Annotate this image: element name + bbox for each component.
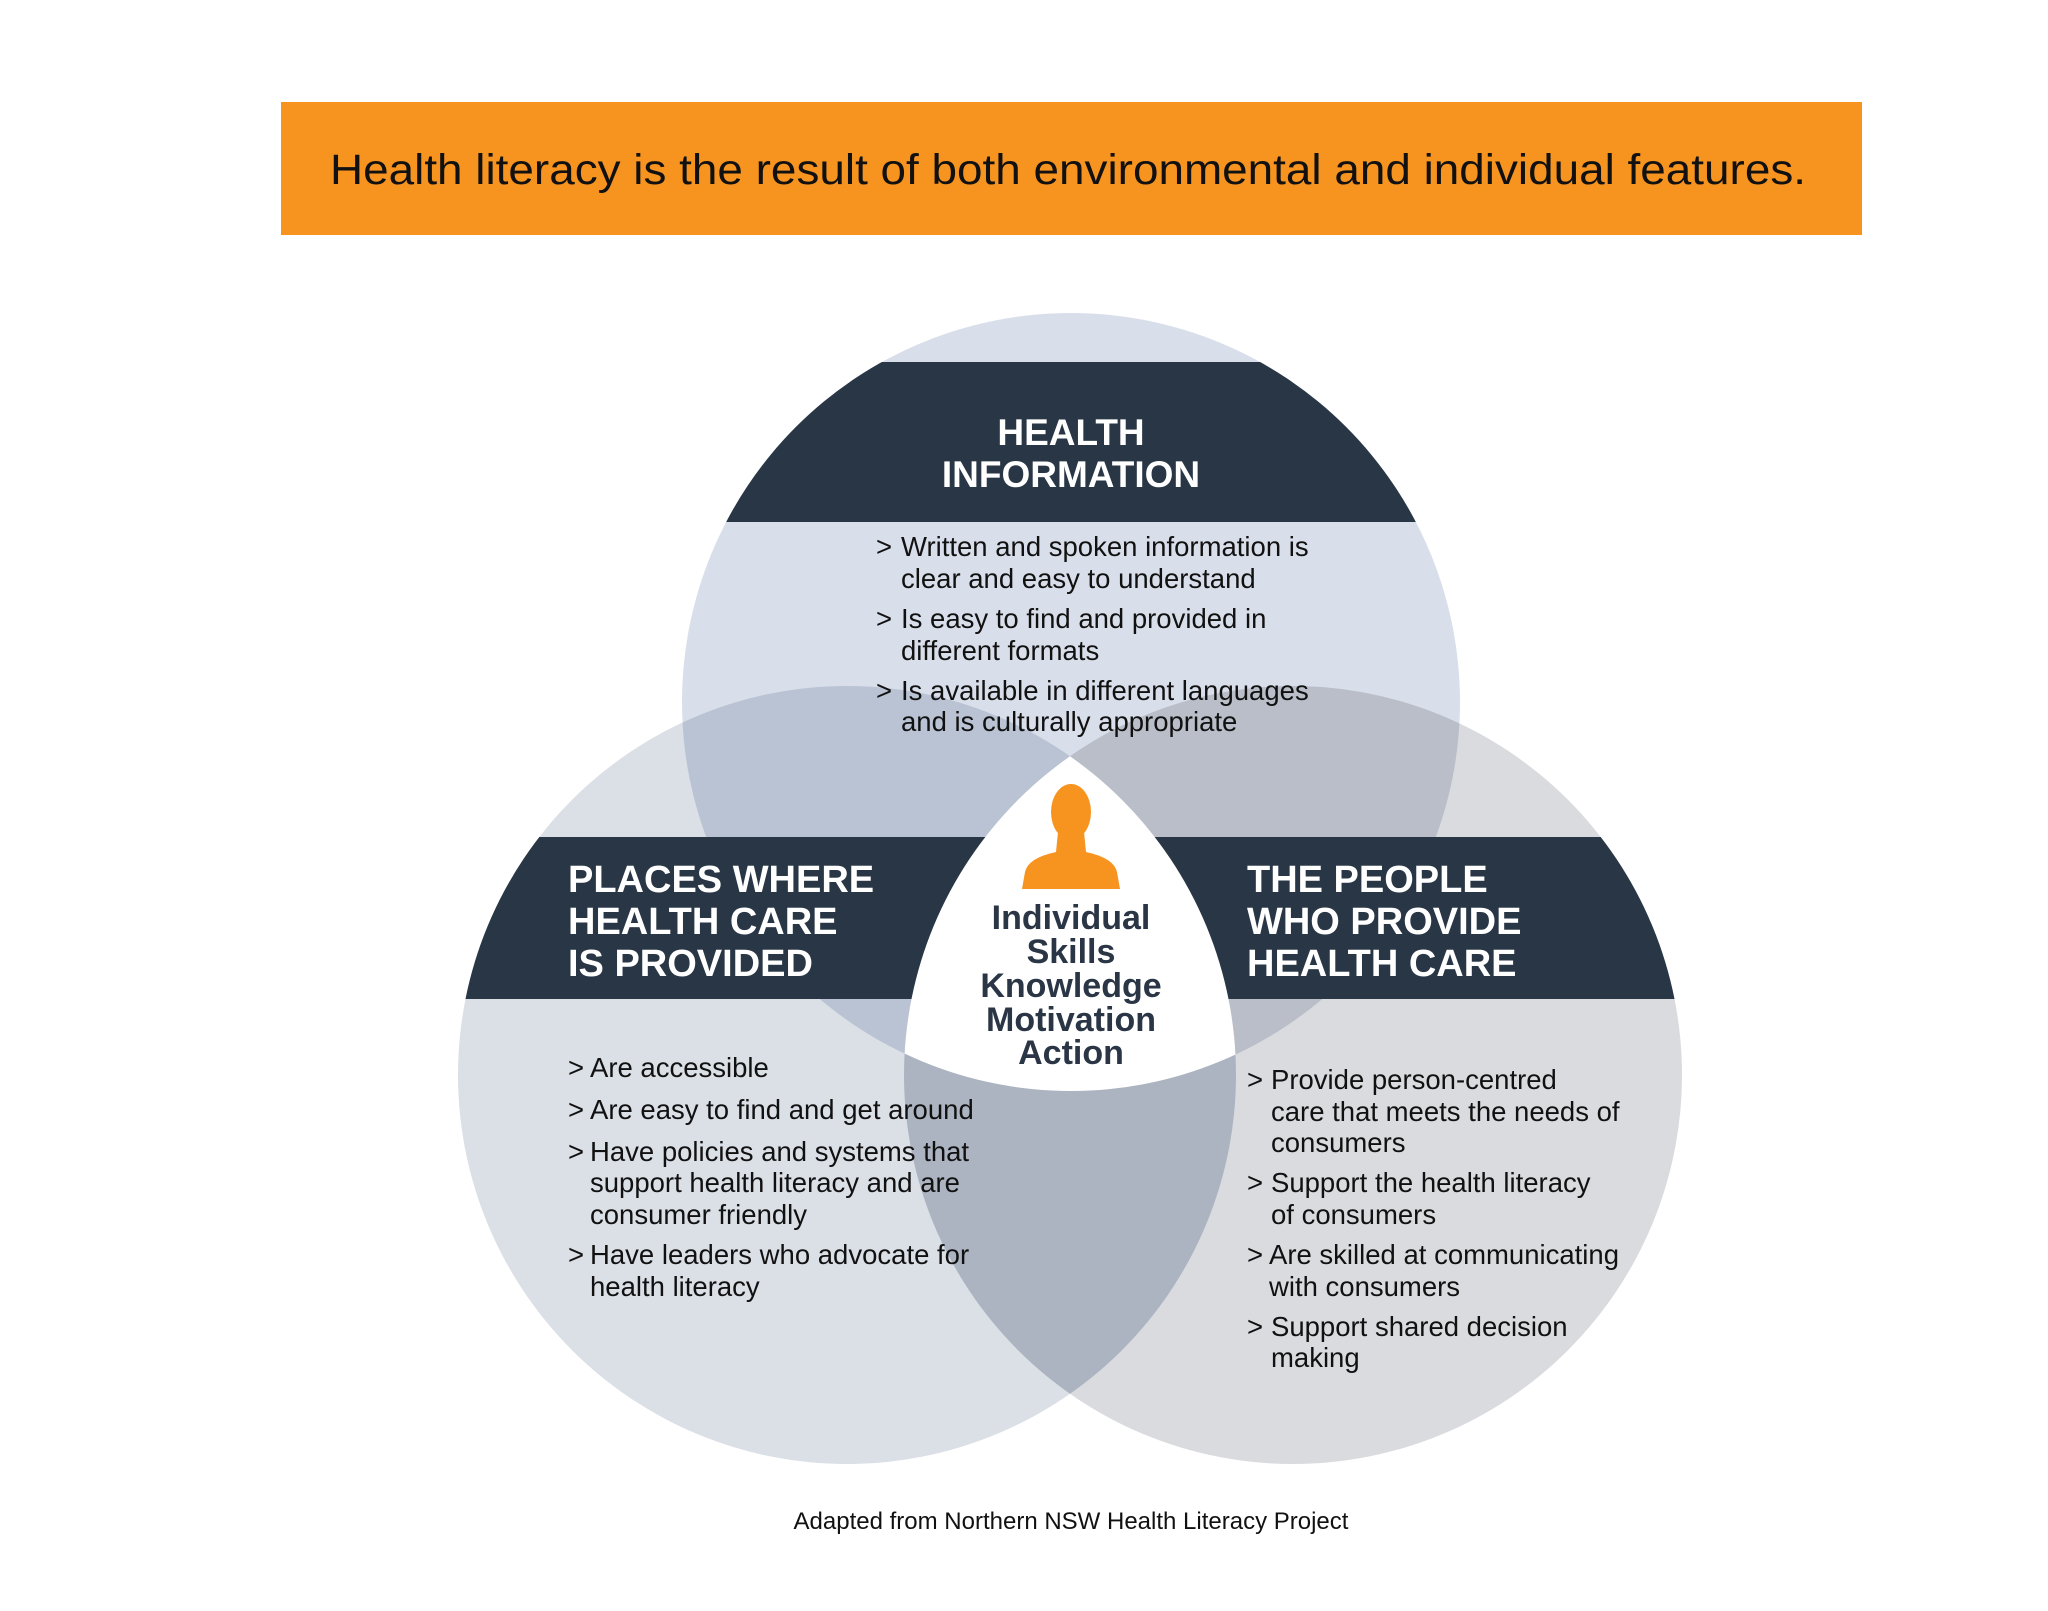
- heading: places where health care is provided: [568, 859, 874, 985]
- bullets: health information: Is available in different languages: [901, 675, 1309, 706]
- banner: [281, 102, 1862, 235]
- center text: individual: Action: [1018, 1034, 1124, 1072]
- heading: the people who provide health care: [1247, 859, 1521, 985]
- bullets: health information: clear and easy to understand: [901, 563, 1256, 594]
- heading: places where health care is provided: PLACES WHERE: [568, 859, 874, 901]
- bullets: places: support health literacy and are: [590, 1167, 960, 1198]
- bullets: places: [568, 1052, 974, 1302]
- bullets: people: care that meets the needs of: [1271, 1096, 1620, 1127]
- bullets: health information: Is easy to find and provided in: [901, 603, 1266, 634]
- bullets: people: making: [1271, 1342, 1360, 1373]
- heading: places where health care is provided: HEALTH CARE: [568, 901, 838, 943]
- heading: health information: INFORMATION: [942, 454, 1200, 495]
- bullets: people: [1247, 1064, 1620, 1373]
- center text: individual: [980, 899, 1162, 1072]
- bullets: places: Are accessible: [590, 1052, 769, 1083]
- bullets: places: >: [568, 1052, 584, 1083]
- bullets: people: >: [1247, 1311, 1263, 1342]
- heading: places where health care is provided: IS PROVIDED: [568, 943, 813, 985]
- bullets: health information: Written and spoken information is: [901, 531, 1309, 562]
- bullets: places: consumer friendly: [590, 1199, 807, 1230]
- bullets: people: Support shared decision: [1271, 1311, 1568, 1342]
- bullets: people: consumers: [1271, 1127, 1406, 1158]
- bullets: places: Are easy to find and get around: [590, 1094, 974, 1125]
- footer source: Adapted from Northern NSW Health Literacy Project: [794, 1508, 1349, 1535]
- bullets: health information: and is culturally appropriate: [901, 706, 1237, 737]
- heading: the people who provide health care: HEALTH CARE: [1247, 943, 1517, 985]
- bullets: people: Support the health literacy: [1271, 1167, 1591, 1198]
- bullets: places: Have policies and systems that: [590, 1136, 969, 1167]
- heading: health information: HEALTH: [997, 412, 1145, 453]
- center text: individual: Individual: [992, 899, 1150, 937]
- bullets: places: >: [568, 1136, 584, 1167]
- heading: the people who provide health care: WHO PROVIDE: [1247, 901, 1521, 943]
- center text: individual: Skills: [1027, 933, 1115, 971]
- bullets: health information: >: [876, 675, 892, 706]
- bullets: places: Have leaders who advocate for: [590, 1239, 969, 1270]
- bullets: people: >: [1247, 1064, 1263, 1095]
- bullets: health information: >: [876, 603, 892, 634]
- bullets: people: >: [1247, 1239, 1263, 1270]
- banner: Health literacy is the result of both environmental and individual features.: [330, 146, 1806, 194]
- icon: person: [1022, 784, 1120, 889]
- bullets: people: with consumers: [1268, 1271, 1460, 1302]
- bullets: places: health literacy: [590, 1271, 760, 1302]
- bullets: places: >: [568, 1094, 584, 1125]
- bullets: places: >: [568, 1239, 584, 1270]
- bullets: people: Provide person-centred: [1271, 1064, 1557, 1095]
- heading: the people who provide health care: THE PEOPLE: [1247, 859, 1488, 901]
- bullets: health information: >: [876, 531, 892, 562]
- bullets: people: of consumers: [1271, 1199, 1436, 1230]
- center text: individual: Motivation: [986, 1001, 1156, 1039]
- heading: health information: [942, 412, 1200, 495]
- venn diagram: [400, 313, 1700, 1464]
- bullets: health information: [876, 531, 1309, 737]
- bullets: people: >: [1247, 1167, 1263, 1198]
- bullets: people: Are skilled at communicating: [1269, 1239, 1619, 1270]
- center text: individual: Knowledge: [980, 967, 1162, 1005]
- bullets: health information: different formats: [901, 635, 1099, 666]
